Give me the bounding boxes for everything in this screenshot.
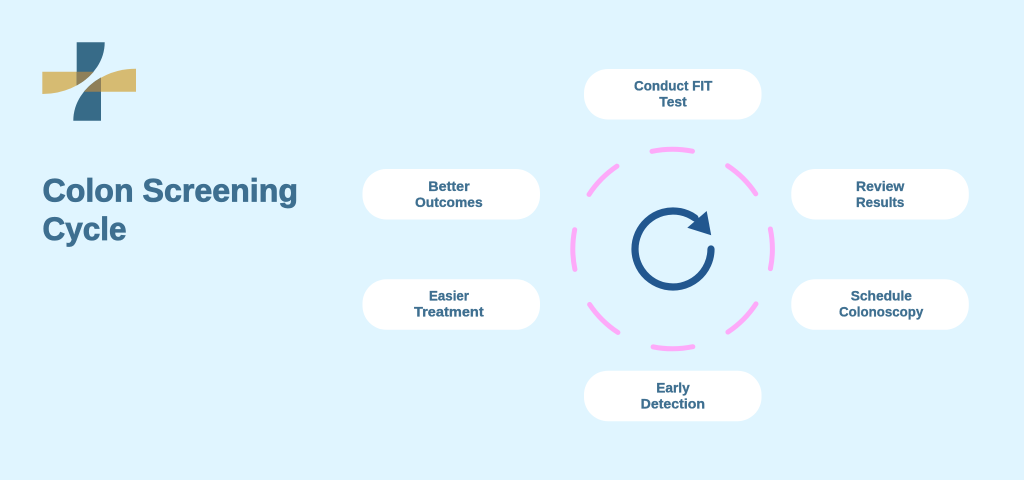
step: Schedule Colonoscopy: Colonoscopy xyxy=(839,304,924,320)
title: Cycle xyxy=(42,211,126,247)
logo: medical cross xyxy=(42,42,136,121)
step: Early Detection: Detection xyxy=(641,396,705,412)
step: Schedule Colonoscopy: Schedule xyxy=(851,288,912,304)
step: Better Outcomes: Outcomes xyxy=(415,194,483,210)
step: Conduct FIT Test xyxy=(584,69,762,120)
step: Review Results: Results xyxy=(856,194,904,210)
step: Better Outcomes xyxy=(362,169,540,220)
title xyxy=(42,172,298,247)
icon: cycle arrow xyxy=(635,211,711,287)
step: Schedule Colonoscopy xyxy=(791,279,969,330)
step: Early Detection: Early xyxy=(656,380,690,396)
title: Colon Screening xyxy=(42,172,298,208)
step: Early Detection xyxy=(584,371,762,421)
step: Easier Treatment: Easier xyxy=(429,288,470,304)
step: Review Results: Review xyxy=(856,178,904,194)
dashed pink ring xyxy=(573,149,772,349)
step: Conduct FIT Test: Test xyxy=(659,94,687,110)
step: Easier Treatment: Treatment xyxy=(414,304,484,320)
step: Better Outcomes: Better xyxy=(428,178,470,194)
step: Review Results xyxy=(791,169,969,220)
step: Easier Treatment xyxy=(362,279,540,330)
step: Conduct FIT Test: Conduct FIT xyxy=(634,78,713,94)
